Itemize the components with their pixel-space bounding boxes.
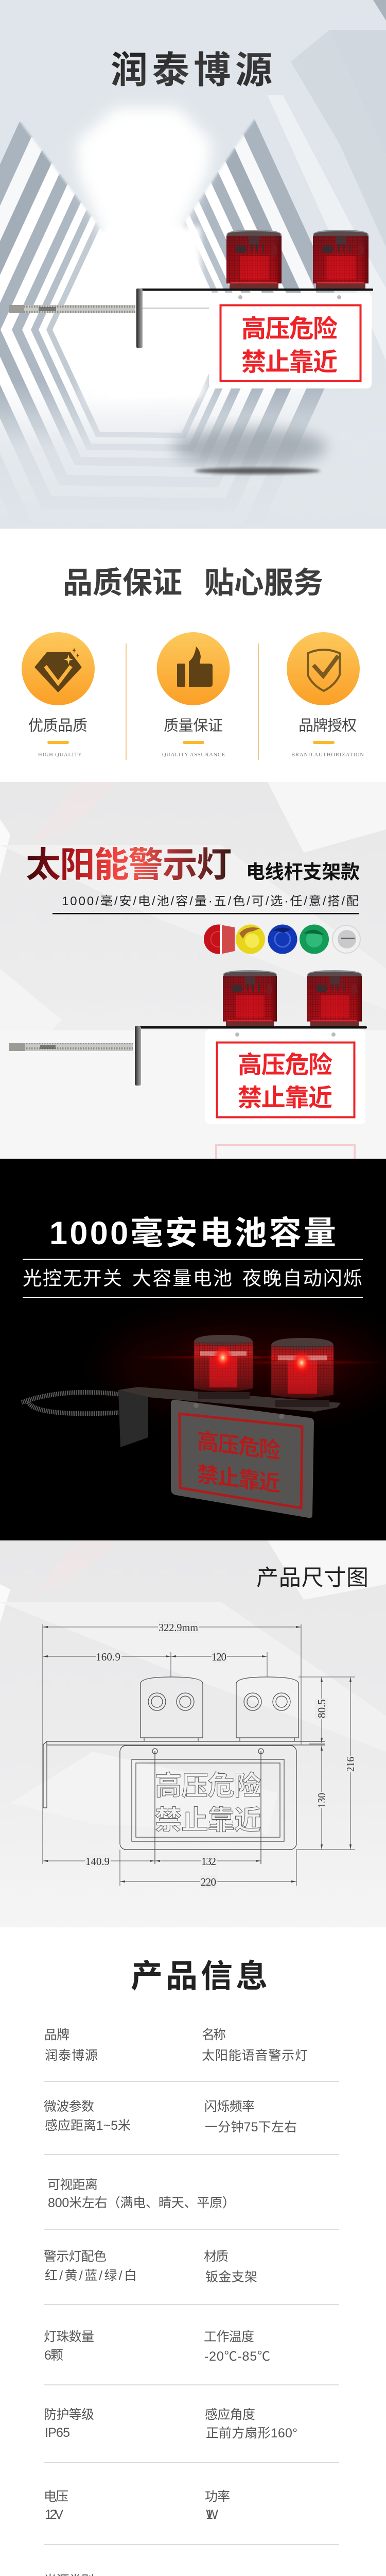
row: beads and temperature: -20℃-85℃ bbox=[204, 2349, 270, 2364]
row: brand and name: 名称 bbox=[202, 2028, 226, 2042]
dimension: 216: 216 bbox=[344, 1757, 357, 1772]
warning sign: 禁止靠近 bbox=[238, 1084, 332, 1111]
label: premium quality: 优质品质 bbox=[28, 717, 87, 734]
lamp left bbox=[194, 1335, 253, 1392]
row: brand and name: 润泰博源 bbox=[45, 2048, 98, 2063]
red haze bbox=[103, 1314, 386, 1417]
panel: product information bbox=[0, 1927, 386, 2576]
sign outline bbox=[120, 1745, 296, 1864]
lamp glow bbox=[163, 1324, 286, 1396]
row: colours and material: 警示灯配色 bbox=[44, 2249, 107, 2264]
dimension: 160.9 and 120: 160.9 bbox=[96, 1651, 120, 1663]
warning sign: 高压危险 bbox=[241, 315, 338, 343]
night warning sign: 高压危险 bbox=[197, 1429, 280, 1463]
dimension: 322.9mm bbox=[43, 1621, 301, 1634]
hero title: 润泰博源 bbox=[111, 50, 272, 91]
row: protection and angle bbox=[44, 2408, 297, 2441]
row: microwave and flash: 闪烁频率 bbox=[204, 2099, 255, 2114]
panel: solar warning light bbox=[0, 782, 386, 1159]
row: brand and name: 品牌 bbox=[44, 2028, 69, 2042]
dimension: 160.9 and 120 bbox=[43, 1650, 267, 1663]
bracket bbox=[118, 1387, 341, 1447]
heading: 1000毫安电池容量 bbox=[49, 1215, 336, 1251]
row: microwave and flash: 一分钟75下左右 bbox=[205, 2120, 297, 2134]
colour options bbox=[204, 924, 360, 954]
warning sign bbox=[205, 1029, 365, 1124]
dimension: 80.5 and 130 bbox=[315, 1677, 328, 1850]
row: colours and material: 红/黄/蓝/绿/白 bbox=[45, 2268, 137, 2283]
label: premium quality: HIGH QUALITY bbox=[38, 752, 82, 758]
feature line: 光控无开关 bbox=[23, 1268, 122, 1289]
row: beads and temperature: 工作温度 bbox=[204, 2330, 254, 2344]
feature line bbox=[23, 1268, 362, 1289]
icon: thumbs up bbox=[156, 632, 230, 705]
feature line: 1000/毫/安/电/池/容/量·五/色/可/选·任/意/搭/配 bbox=[62, 894, 359, 908]
mounting bracket bbox=[136, 289, 373, 348]
sign text outlined: 高压危险 bbox=[155, 1771, 261, 1801]
panel: quality guarantee bbox=[0, 529, 386, 782]
dimension: 160.9 and 120: 120 bbox=[212, 1651, 226, 1663]
icon: shield bbox=[287, 632, 360, 705]
label: premium quality bbox=[28, 717, 87, 758]
row: colours and material: 材质 bbox=[204, 2249, 229, 2264]
steel strap bbox=[9, 1043, 133, 1051]
row: beads and temperature bbox=[44, 2330, 270, 2364]
central white glow bbox=[76, 107, 212, 402]
heading: 产品信息 bbox=[131, 1959, 268, 1994]
background facets bbox=[0, 782, 386, 1159]
label: brand authorization: 品牌授权 bbox=[299, 717, 357, 734]
label: quality assurance: 质量保证 bbox=[164, 717, 223, 734]
dimension: 220: 220 bbox=[201, 1876, 216, 1888]
heading: 品质保证 bbox=[63, 566, 182, 600]
sign text outlined bbox=[155, 1771, 261, 1836]
night warning sign bbox=[171, 1400, 314, 1518]
row: microwave and flash: 感应距离1~5米 bbox=[45, 2119, 131, 2133]
row: microwave and flash: 微波参数 bbox=[44, 2099, 94, 2114]
row: voltage and power: 12V bbox=[45, 2507, 63, 2522]
panel: 1000mAh battery night view bbox=[0, 1159, 386, 1540]
row: colours and material: 钣金支架 bbox=[205, 2270, 257, 2284]
row: voltage and power: 1W bbox=[206, 2507, 218, 2522]
row: brand and name: 太阳能语音警示灯 bbox=[202, 2048, 308, 2063]
warning sign bbox=[209, 293, 372, 388]
label: brand authorization: BRAND AUTHORIZATION bbox=[291, 752, 364, 758]
floor shadow bbox=[172, 428, 327, 467]
lamp left bbox=[226, 230, 282, 289]
label: quality assurance: QUALITY ASSURANCE bbox=[162, 752, 225, 758]
hero product: warning lamps with sign bbox=[9, 230, 373, 388]
dimension: 140.9 and 132: 140.9 bbox=[85, 1855, 110, 1868]
row: voltage and power: 电压 bbox=[44, 2489, 68, 2504]
hexagon tunnel background bbox=[0, 118, 335, 457]
label: quality assurance bbox=[162, 717, 225, 758]
extension lines bbox=[43, 1624, 355, 1886]
dimension: 140.9 and 132 bbox=[43, 1855, 261, 1868]
subheading: pole bracket: 电线杆支架款 bbox=[246, 861, 360, 883]
lamp left bbox=[223, 970, 277, 1026]
row: visible distance: 800米左右（满电、晴天、平原） bbox=[48, 2196, 235, 2210]
dimension: 216 bbox=[344, 1677, 357, 1850]
panel: product dimensions bbox=[0, 1540, 386, 1927]
label: brand authorization bbox=[291, 717, 364, 758]
dimension: 220 bbox=[120, 1875, 296, 1888]
row: voltage and power: 功率 bbox=[205, 2489, 230, 2504]
sign reflection bbox=[216, 1145, 355, 1159]
lamp bases bbox=[198, 1392, 329, 1407]
row: beads and temperature: 6颗 bbox=[44, 2348, 63, 2363]
hero panel bbox=[0, 0, 386, 541]
lamp outlines bbox=[141, 1677, 299, 1741]
heading: 产品尺寸图 bbox=[256, 1566, 369, 1590]
dimension: 80.5 and 130: 80.5 bbox=[315, 1699, 328, 1718]
top wall cover bbox=[20, 118, 255, 230]
row: brand and name bbox=[44, 2028, 308, 2063]
upper right wall shading bbox=[268, 0, 386, 361]
dimension: 140.9 and 132: 132 bbox=[201, 1855, 216, 1868]
light flares bbox=[129, 1345, 386, 1375]
steel strap ring bbox=[22, 1392, 141, 1414]
night warning sign: 禁止靠近 bbox=[197, 1462, 280, 1496]
row: protection and angle: 感应角度 bbox=[205, 2408, 255, 2422]
row: microwave and flash bbox=[44, 2099, 297, 2134]
row: visible distance: 可视距离 bbox=[47, 2178, 98, 2192]
dimension: 80.5 and 130: 130 bbox=[315, 1793, 328, 1808]
row: visible distance bbox=[47, 2178, 235, 2210]
row: protection and angle: 正前方扇形160° bbox=[206, 2426, 297, 2441]
warning sign: 禁止靠近 bbox=[241, 349, 338, 376]
lamp right bbox=[313, 230, 369, 289]
heading bbox=[63, 566, 323, 600]
feature line: 夜晚自动闪烁 bbox=[242, 1268, 362, 1289]
background facets bbox=[0, 1540, 386, 1834]
lamp right bbox=[271, 1338, 334, 1398]
row: colours and material bbox=[44, 2249, 257, 2284]
row: voltage and power bbox=[44, 2489, 230, 2522]
dimension drawing bbox=[43, 1621, 357, 1888]
mounting bracket bbox=[135, 1026, 367, 1086]
row: protection and angle: 防护等级 bbox=[44, 2408, 94, 2422]
steel strap bbox=[9, 305, 135, 313]
warning sign: 高压危险 bbox=[238, 1051, 332, 1078]
heading: 贴心服务 bbox=[204, 566, 323, 600]
bracket outline bbox=[43, 1741, 325, 1808]
icon: diamond bbox=[22, 632, 95, 705]
row: protection and angle: IP65 bbox=[45, 2426, 70, 2440]
feature line: 大容量电池 bbox=[132, 1268, 232, 1289]
heading: 太阳能警示灯 bbox=[26, 845, 232, 885]
lamp right bbox=[307, 970, 362, 1026]
dimension: 322.9mm: 322.9mm bbox=[159, 1621, 198, 1634]
sign text outlined: 禁止靠近 bbox=[155, 1806, 261, 1836]
row: beads and temperature: 灯珠数量 bbox=[44, 2330, 94, 2344]
